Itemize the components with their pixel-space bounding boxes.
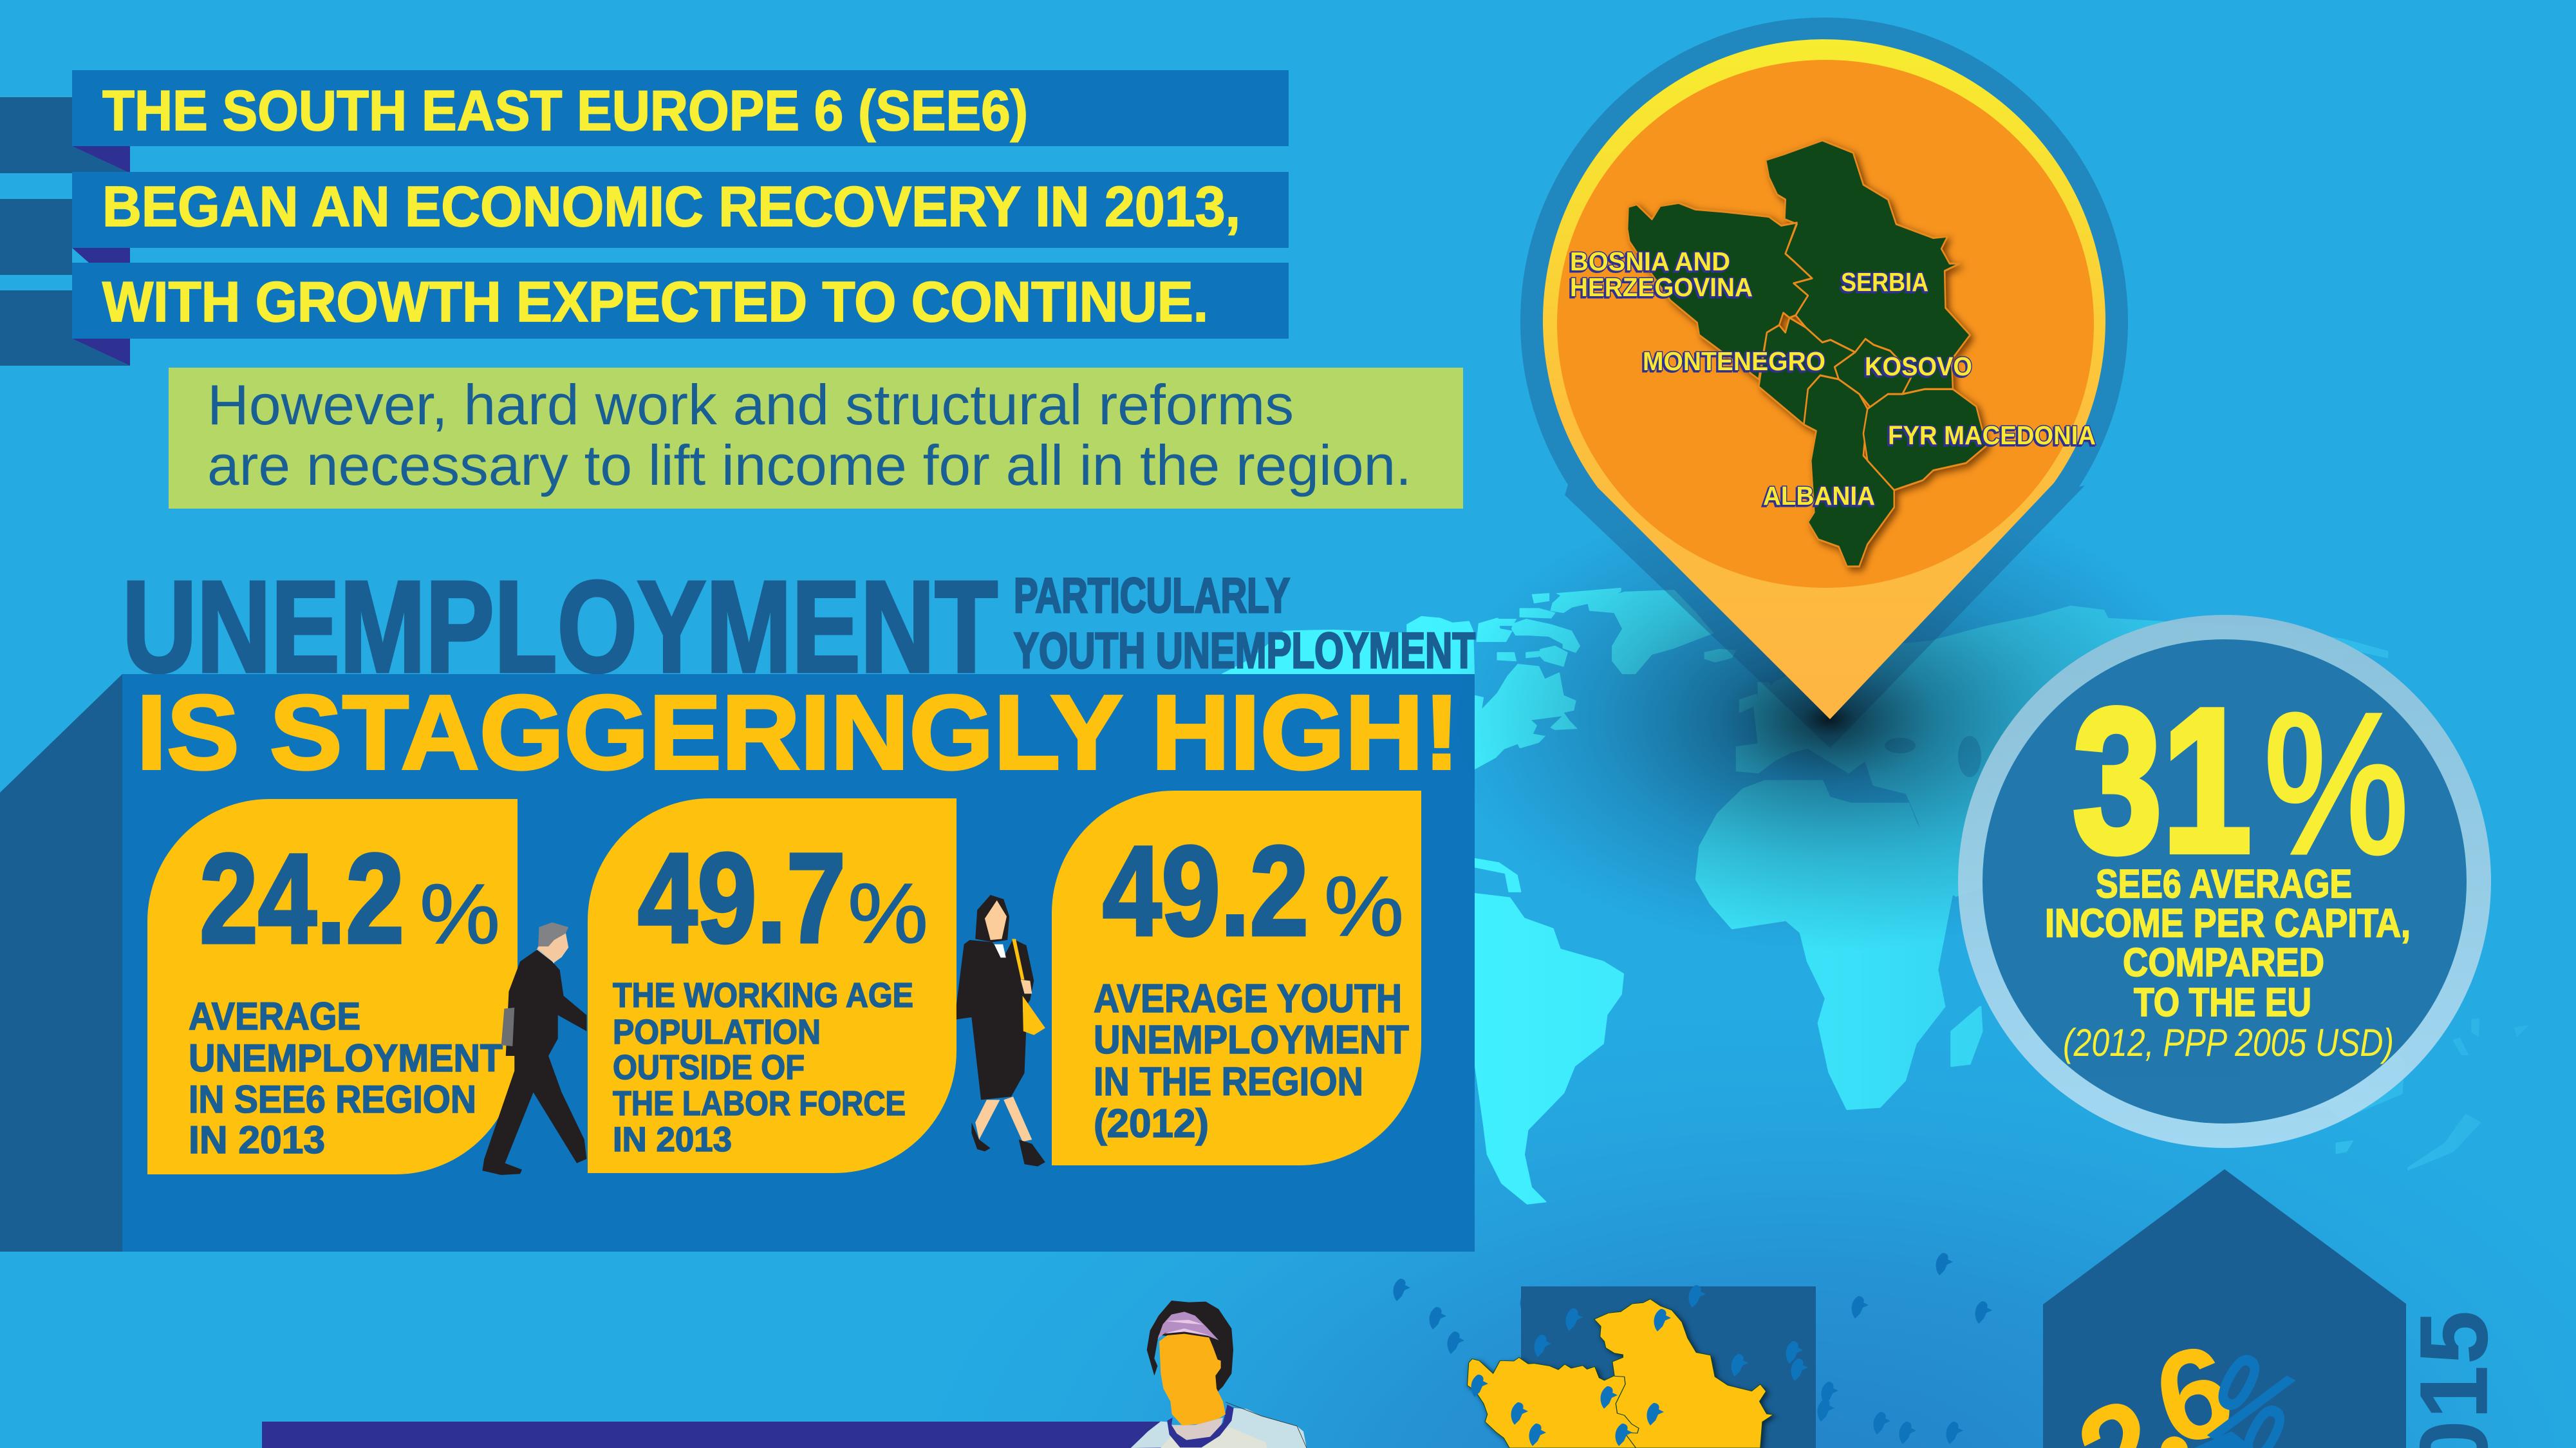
stat card 3: IN THE REGION	[1094, 1060, 1363, 1104]
country: Kosovo	[1834, 339, 1912, 409]
country labels: KOSOVO	[1865, 352, 1972, 381]
headline banner stack	[0, 70, 1289, 366]
banner line 1: THE SOUTH EAST EUROPE 6 (SEE6)	[102, 79, 1028, 142]
stat card 2: %	[848, 866, 928, 961]
income circle	[1958, 615, 2491, 1148]
world map	[1222, 587, 2481, 1205]
icon: walking businessman	[482, 923, 586, 1175]
income circle: COMPARED	[2123, 941, 2324, 985]
portrait: young person	[1131, 1301, 1307, 1448]
green callout: However, hard work and structural reforms	[207, 373, 1294, 437]
green callout	[169, 368, 1463, 509]
yellow map	[1467, 1299, 1773, 1448]
birds on dark panel	[1535, 1285, 1808, 1381]
green callout: are necessary to lift income for all in the region.	[207, 433, 1412, 497]
stat card 3	[1052, 791, 1421, 1165]
banner fold: line 1	[0, 97, 130, 173]
country labels	[1570, 247, 2096, 511]
income circle: INCOME PER CAPITA,	[2045, 901, 2411, 946]
stat card 2: IN 2013	[613, 1120, 732, 1159]
map pin shadow ring	[1520, 17, 2128, 748]
region map	[1627, 140, 1986, 567]
unemployment panel	[0, 673, 1475, 1252]
banner line 1	[72, 70, 1289, 146]
stat card 3: (2012)	[1094, 1102, 1209, 1146]
stat card 2	[588, 798, 957, 1173]
stat card 3: UNEMPLOYMENT	[1094, 1018, 1409, 1062]
country: Serbia	[1766, 140, 1970, 394]
country labels: HERZEGOVINA	[1570, 272, 1753, 302]
country: Bosnia and Herzegovina	[1627, 203, 1812, 379]
country labels: MONTENEGRO	[1643, 346, 1825, 376]
forecast house	[2043, 1169, 2406, 1448]
stat card 3: 49.2	[1103, 820, 1309, 962]
stat card 3: AVERAGE YOUTH	[1094, 977, 1402, 1021]
map pin	[1543, 39, 2105, 719]
Balkan yellow map panel	[1467, 1285, 1816, 1448]
big number: 31	[2073, 666, 2252, 895]
income circle: %	[2264, 672, 2409, 895]
stat card 1: IN SEE6 REGION	[189, 1078, 476, 1121]
circle caption: SEE6 AVERAGE	[2096, 862, 2352, 907]
income circle: (2012, PPP 2005 USD)	[2063, 1021, 2394, 1064]
unemployment heading: YOUTH UNEMPLOYMENT	[1014, 622, 1475, 679]
country labels: SERBIA	[1841, 267, 1928, 297]
banner fold: line 2	[0, 199, 130, 275]
stat card 2: OUTSIDE OF	[613, 1048, 805, 1087]
country: Albania	[1804, 375, 1894, 567]
stat card 1: IN 2013	[189, 1118, 325, 1161]
banner fold: line 3	[0, 290, 130, 366]
forecast value	[2055, 1316, 2320, 1448]
stat card 2: POPULATION	[613, 1013, 821, 1051]
stat card 1: %	[420, 867, 500, 961]
income circle: TO THE EU	[2134, 981, 2311, 1025]
country labels: ALBANIA	[1763, 481, 1875, 511]
birds	[1394, 1253, 1992, 1444]
country labels: FYR MACEDONIA	[1888, 420, 2096, 450]
icon: walking businesswoman	[957, 895, 1045, 1167]
unemployment heading: PARTICULARLY	[1014, 569, 1290, 623]
country: Montenegro	[1759, 317, 1855, 425]
stat card 2: THE WORKING AGE	[613, 976, 913, 1015]
banner line 3: WITH GROWTH EXPECTED TO CONTINUE.	[102, 270, 1208, 334]
stat card 1	[147, 799, 518, 1174]
unemployment heading: UNEMPLOYMENT	[122, 554, 998, 699]
stat card 2: THE LABOR FORCE	[613, 1084, 906, 1123]
pin tip shadow	[1443, 487, 2216, 951]
country: North Macedonia	[1863, 389, 1986, 490]
stat card 1: 24.2	[200, 827, 404, 970]
stat card 1: UNEMPLOYMENT	[189, 1037, 503, 1080]
birds on yellow map	[1471, 1309, 1671, 1446]
panel heading: IS STAGGERINGLY HIGH!	[136, 673, 1460, 791]
stat card 1: AVERAGE	[189, 995, 360, 1038]
navy banner	[262, 1422, 1163, 1448]
stat card 2: 49.7	[638, 827, 846, 969]
country labels: BOSNIA AND	[1570, 247, 1730, 276]
banner line 2: BEGAN AN ECONOMIC RECOVERY IN 2013,	[102, 174, 1240, 238]
stat card 3: %	[1324, 859, 1404, 954]
